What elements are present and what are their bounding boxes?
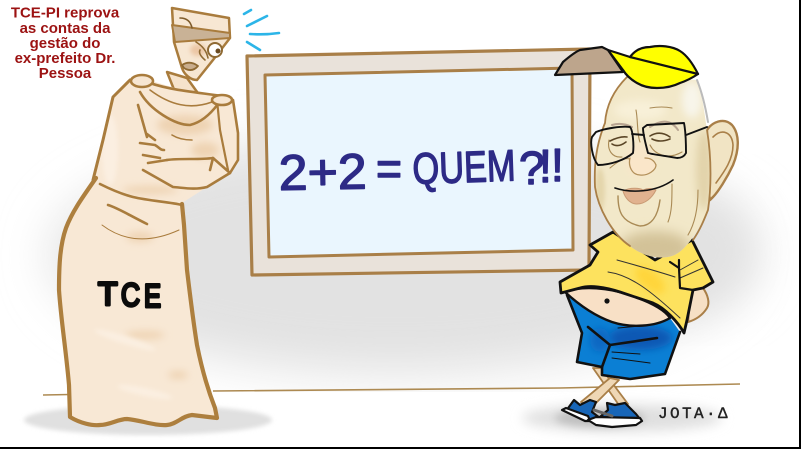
glasses (591, 123, 707, 165)
signature: JOTA·Δ (658, 405, 730, 423)
wrinkles (609, 107, 698, 235)
head (167, 8, 230, 96)
shorts shading (590, 326, 672, 352)
board frame (247, 49, 590, 275)
legs (581, 368, 628, 408)
headline: as contas da (20, 20, 111, 37)
closed eyes (610, 133, 670, 146)
board equation: QUEM (412, 141, 516, 194)
robe folds and crossed arms (100, 80, 238, 239)
figure: man (555, 46, 738, 427)
shorts outline (567, 295, 680, 379)
head (591, 77, 738, 265)
robe (59, 78, 238, 425)
figure: blindfolded justice (59, 8, 238, 425)
icon: alert marks (244, 10, 279, 50)
floor line (43, 384, 740, 395)
board equation: ! (551, 139, 564, 191)
shoulder brooches (131, 75, 232, 105)
robe label: C (121, 277, 140, 313)
board equation: 2+2 (278, 143, 367, 201)
shirt highlight (630, 262, 670, 298)
face outline (595, 77, 710, 246)
belly (565, 288, 670, 326)
headline: ex-prefeito Dr. (15, 50, 115, 67)
robe label: E (144, 278, 161, 314)
arm behind back (688, 285, 708, 322)
cap (555, 46, 698, 88)
board equation (278, 139, 564, 201)
shorts (567, 295, 680, 379)
robe shading (93, 115, 219, 402)
board equation: ? (519, 142, 545, 194)
face (595, 77, 710, 258)
ear (707, 121, 738, 200)
board (247, 49, 590, 275)
smile line (615, 180, 673, 191)
headline: Pessoa (39, 65, 92, 82)
floor shadow: man (522, 404, 722, 432)
shirt (560, 232, 713, 333)
board equation: = (376, 143, 402, 196)
board equation: ! (539, 140, 552, 192)
navel (604, 298, 610, 304)
headline: gestão do (30, 35, 100, 52)
lips (623, 188, 656, 204)
board surface (265, 68, 573, 257)
floor shadow: justice figure (24, 405, 272, 435)
robe outline (93, 80, 130, 180)
robe label (98, 276, 161, 314)
nose (629, 158, 656, 175)
face shading (595, 82, 712, 265)
robe label: T (98, 276, 118, 312)
shirt creases (608, 260, 703, 318)
headline: TCE-PI reprova (11, 4, 120, 22)
shoes (562, 400, 642, 427)
